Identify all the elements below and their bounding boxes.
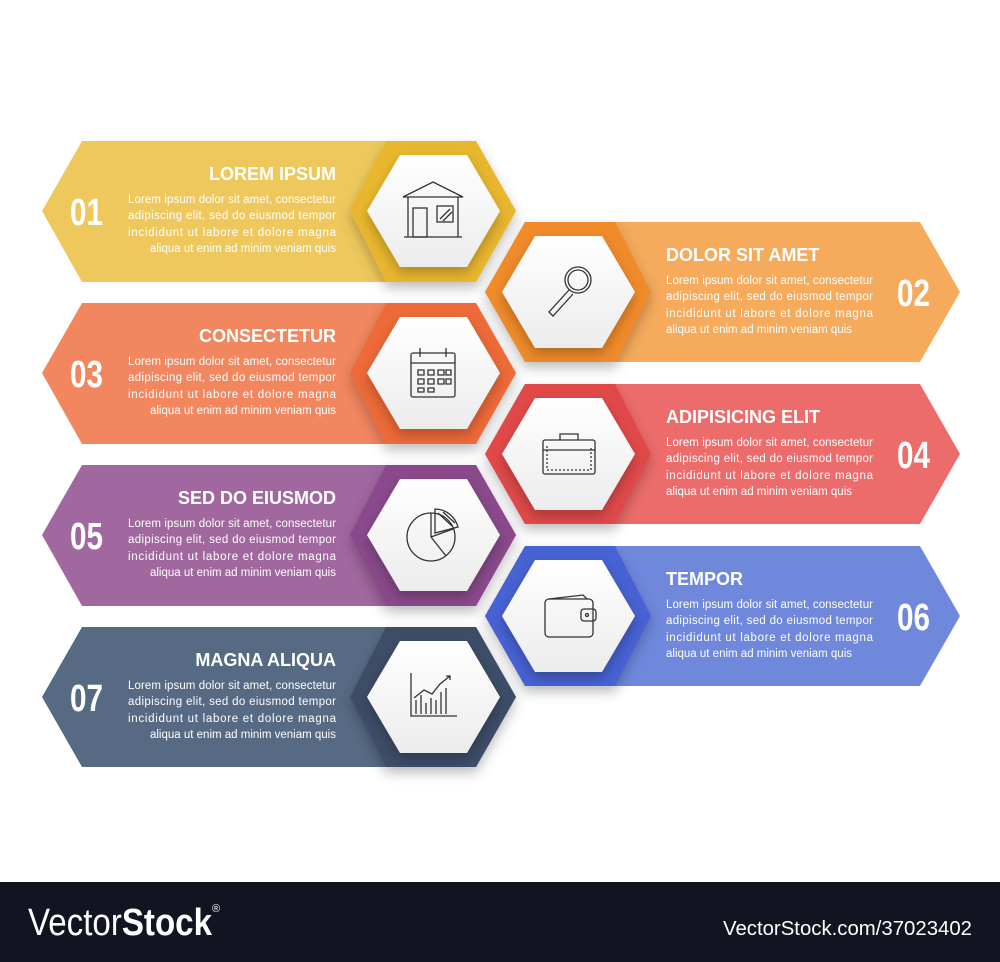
icon hexagon: magnifier xyxy=(502,236,635,348)
panel 02 xyxy=(485,222,960,362)
text block 01: aliqua ut enim ad minim veniam quis xyxy=(150,243,336,255)
icon hexagon: calendar xyxy=(367,317,500,429)
panel 06 xyxy=(485,546,960,686)
text block 07: adipiscing elit, sed do eiusmod tempor xyxy=(128,696,336,708)
number 07: 07 xyxy=(70,678,103,720)
text block 03: incididunt ut labore et dolore magna xyxy=(128,389,337,401)
text block 02: adipiscing elit, sed do eiusmod tempor xyxy=(666,291,873,303)
text block 06: aliqua ut enim ad minim veniam quis xyxy=(666,648,852,660)
text block 05: incididunt ut labore et dolore magna xyxy=(128,551,337,563)
panel 07 xyxy=(42,627,516,767)
text block 01 xyxy=(128,194,337,255)
icon hexagon: house xyxy=(367,155,500,267)
text block 04: Lorem ipsum dolor sit amet, consectetur xyxy=(666,437,873,449)
number 01: 01 xyxy=(70,192,103,234)
text block 04: adipiscing elit, sed do eiusmod tempor xyxy=(666,453,873,465)
number 02: 02 xyxy=(897,273,930,315)
image id: VectorStock.com/37023402 xyxy=(723,918,972,940)
number 05: 05 xyxy=(70,516,103,558)
heading: dolor sit amet: DOLOR SIT AMET xyxy=(666,245,819,265)
footer bar: ® xyxy=(212,903,220,915)
text block 02: aliqua ut enim ad minim veniam quis xyxy=(666,324,852,336)
number 03: 03 xyxy=(70,354,103,396)
text block 02 xyxy=(666,275,874,336)
icon hexagon: wallet xyxy=(502,560,635,672)
icon hexagon: briefcase xyxy=(502,398,635,510)
text block 07 xyxy=(128,680,337,741)
text block 02: incididunt ut labore et dolore magna xyxy=(666,308,874,320)
text block 05: adipiscing elit, sed do eiusmod tempor xyxy=(128,534,336,546)
text block 02: Lorem ipsum dolor sit amet, consectetur xyxy=(666,275,873,287)
text block 07: Lorem ipsum dolor sit amet, consectetur xyxy=(128,680,336,692)
heading: lorem ipsum: LOREM IPSUM xyxy=(209,164,336,184)
panel 04 xyxy=(485,384,960,524)
text block 01: incididunt ut labore et dolore magna xyxy=(128,227,337,239)
number 06: 06 xyxy=(897,597,930,639)
panel 03 xyxy=(42,303,516,444)
heading: tempor: TEMPOR xyxy=(666,569,743,589)
heading: magna aliqua: MAGNA ALIQUA xyxy=(195,650,336,670)
text block 07: incididunt ut labore et dolore magna xyxy=(128,713,337,725)
text block 05 xyxy=(128,518,337,579)
text block 06: adipiscing elit, sed do eiusmod tempor xyxy=(666,615,873,627)
text block 06: Lorem ipsum dolor sit amet, consectetur xyxy=(666,599,873,611)
panel 05 xyxy=(42,465,516,606)
text block 03: Lorem ipsum dolor sit amet, consectetur xyxy=(128,356,336,368)
text block 06 xyxy=(666,599,874,660)
text block 05: aliqua ut enim ad minim veniam quis xyxy=(150,567,336,579)
heading: adipisicing elit: ADIPISICING ELIT xyxy=(666,407,820,427)
text block 04: aliqua ut enim ad minim veniam quis xyxy=(666,486,852,498)
text block 04: incididunt ut labore et dolore magna xyxy=(666,470,874,482)
text block 03 xyxy=(128,356,337,417)
text block 03: adipiscing elit, sed do eiusmod tempor xyxy=(128,372,336,384)
panel 01 xyxy=(42,141,516,282)
text block 07: aliqua ut enim ad minim veniam quis xyxy=(150,729,336,741)
icon hexagon: pie chart xyxy=(367,479,500,591)
text block 05: Lorem ipsum dolor sit amet, consectetur xyxy=(128,518,336,530)
text block 04 xyxy=(666,437,874,498)
text block 01: Lorem ipsum dolor sit amet, consectetur xyxy=(128,194,336,206)
icon hexagon: bar chart xyxy=(367,641,500,753)
heading: sed do eiusmod: SED DO EIUSMOD xyxy=(178,488,336,508)
footer bar xyxy=(0,882,1000,962)
text block 01: adipiscing elit, sed do eiusmod tempor xyxy=(128,210,336,222)
logo: VectorStock xyxy=(28,902,213,944)
text block 06: incididunt ut labore et dolore magna xyxy=(666,632,874,644)
number 04: 04 xyxy=(897,435,930,477)
heading: consectetur: CONSECTETUR xyxy=(199,326,336,346)
text block 03: aliqua ut enim ad minim veniam quis xyxy=(150,405,336,417)
